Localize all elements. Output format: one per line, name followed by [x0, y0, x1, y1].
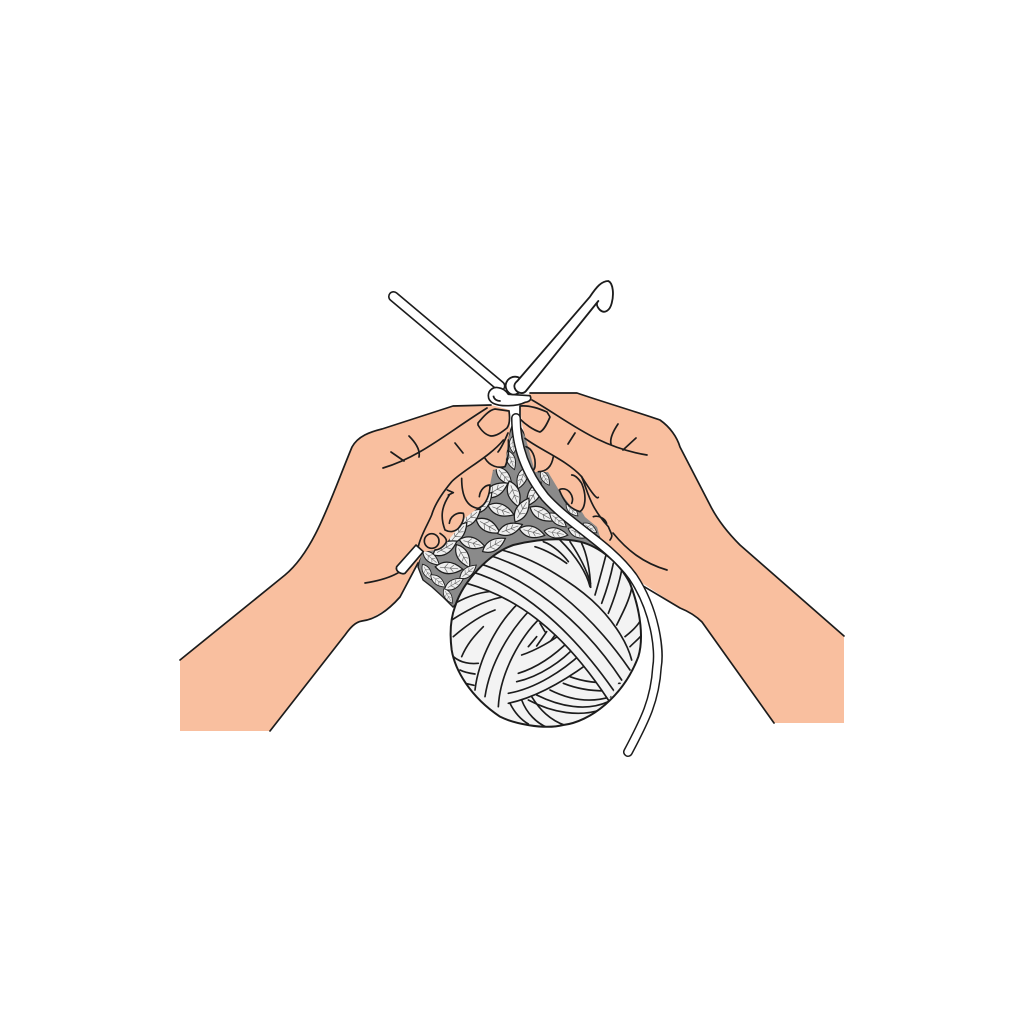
ball of yarn: [451, 539, 642, 728]
yarn strands: [452, 540, 642, 728]
back strands: [535, 540, 642, 647]
left hand outline: [180, 405, 491, 731]
ball outline: [451, 539, 641, 727]
crochet fabric: [418, 418, 612, 607]
strand band B: [475, 602, 542, 707]
lower loop: [488, 387, 531, 406]
left index finger: [383, 408, 508, 468]
left hand creases: [365, 436, 463, 583]
left hand lower needle: [396, 545, 423, 574]
left hand: [180, 405, 510, 731]
right hand: [520, 393, 844, 723]
right curled fingers: [525, 438, 612, 540]
right hand creases: [568, 424, 667, 570]
right index finger: [532, 400, 647, 455]
crochet hook: right hook: [514, 281, 613, 393]
strand band A: [490, 590, 618, 698]
left thumbnail: [478, 409, 510, 436]
slip stitch loops: [488, 377, 531, 406]
illustration: hands crocheting: [180, 281, 844, 752]
working yarn: [516, 418, 658, 752]
right thumbnail: [520, 406, 550, 432]
fabric stitches: [419, 436, 607, 605]
strand band C: [546, 641, 552, 648]
left curled fingers: [418, 440, 509, 550]
crochet hook: left needle: [394, 296, 500, 386]
upper loop: [506, 377, 522, 395]
right hand outline: [530, 393, 844, 723]
